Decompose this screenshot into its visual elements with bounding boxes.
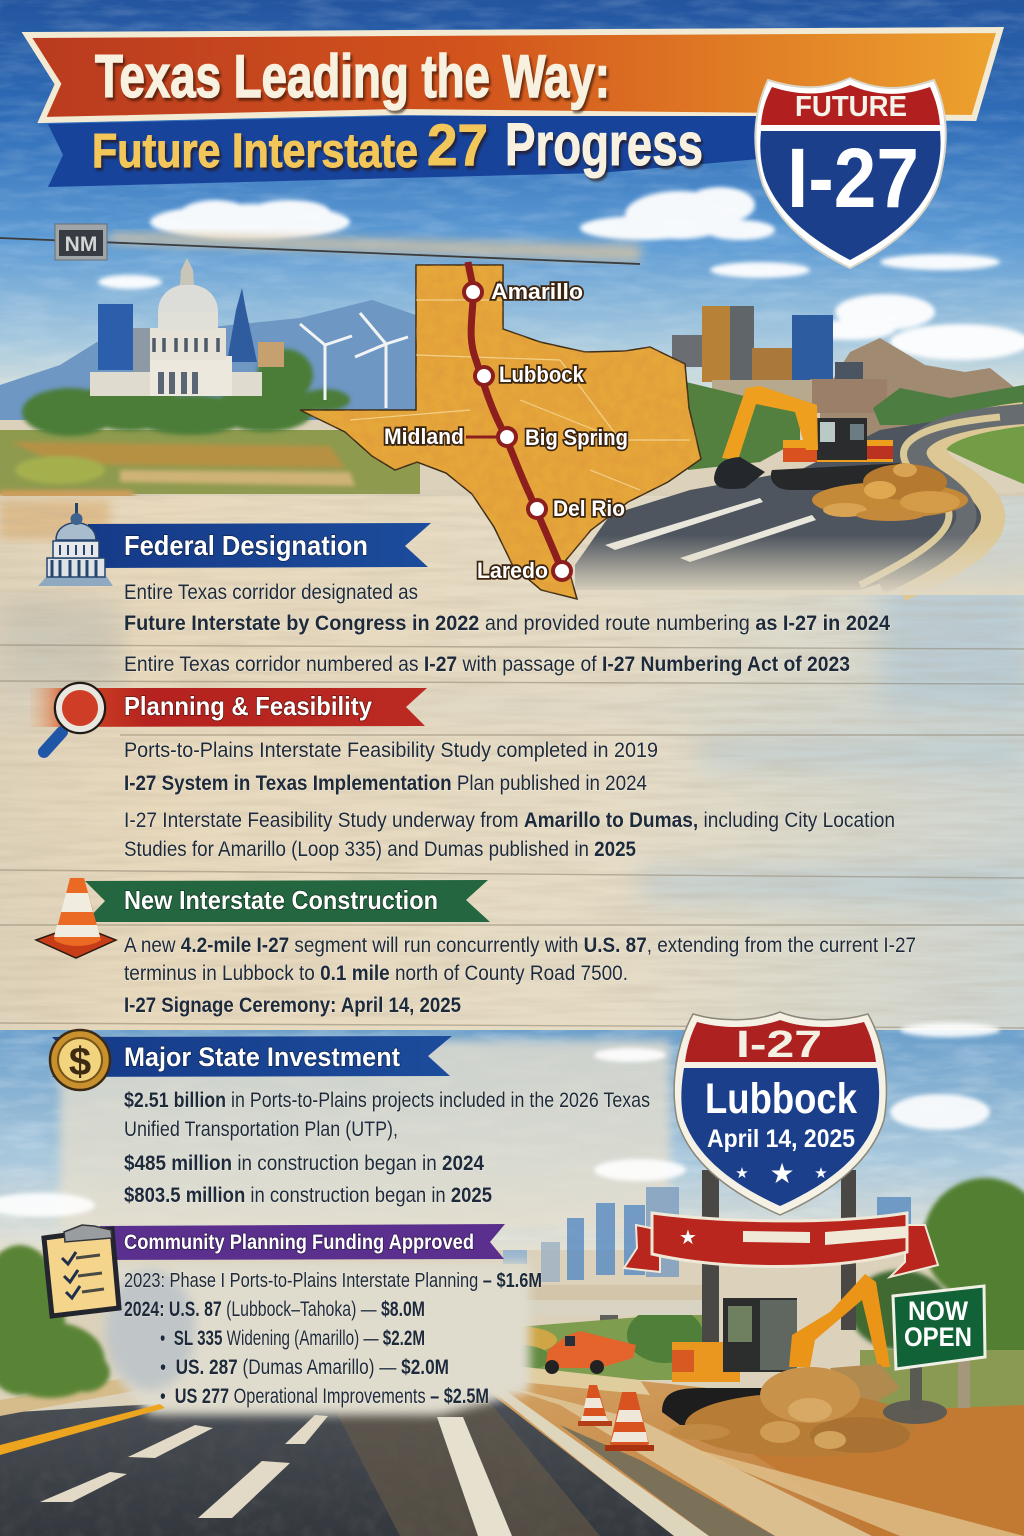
body text: • SL 335 Widening (Amarillo) — $2.2M [160, 1327, 425, 1350]
map labels [384, 279, 628, 583]
Lubbock shield sign: ★ [735, 1165, 749, 1182]
heading: Federal Designation [124, 530, 368, 561]
traffic cones [578, 1385, 654, 1451]
Lubbock shield sign: I-27 [736, 1024, 822, 1066]
body text [124, 1089, 650, 1207]
Lubbock shield sign: ★ [814, 1165, 828, 1182]
map labels: Amarillo [491, 279, 583, 304]
clouds top [98, 187, 1024, 360]
panel: major state investment [50, 1030, 650, 1207]
left shoulder [0, 1372, 165, 1416]
title line 1: Texas Leading the Way: [95, 43, 610, 110]
map labels: Laredo [477, 558, 548, 583]
plank band top [110, 232, 640, 262]
heading: Planning & Feasibility [124, 691, 372, 721]
orange ribbon [27, 30, 1000, 120]
blue wash on paper [0, 560, 1024, 900]
tan verge [480, 1362, 650, 1395]
yellow bush [15, 456, 105, 484]
field tan strips [0, 442, 355, 500]
road fade into paper [560, 535, 1024, 595]
Now Open sign: OPEN [904, 1322, 972, 1352]
body text [124, 739, 895, 861]
green trees left [22, 349, 350, 436]
body text: Unified Transportation Plan (UTP), [124, 1118, 398, 1141]
dirt pile top [812, 463, 968, 521]
gray wash on paper [0, 600, 120, 690]
body text: $803.5 million in construction began in 2025 [124, 1184, 492, 1207]
wind turbines [300, 313, 408, 408]
title banner [27, 30, 1000, 187]
heading: Major State Investment [124, 1042, 400, 1072]
city marker: Laredo [553, 562, 571, 580]
lower paper wash behind text [60, 1040, 670, 1230]
dirt pile bottom [670, 1367, 947, 1457]
lower sky [0, 1030, 1024, 1250]
mountains right [820, 338, 1024, 440]
title line 2: Future Interstate [92, 125, 418, 178]
Now Open sign [893, 1286, 985, 1410]
heading ribbon [100, 1224, 505, 1260]
orange truck [545, 1331, 636, 1374]
body text: Ports-to-Plains Interstate Feasibility Study completed in 2019 [124, 739, 658, 762]
body text: terminus in Lubbock to 0.1 mile north of County Road 7500. [124, 962, 628, 985]
heading ribbon [88, 523, 431, 568]
body text [124, 934, 916, 1017]
body text: I-27 System in Texas Implementation Plan published in 2024 [124, 772, 647, 795]
body text: $2.51 billion in Ports-to-Plains projects included in the 2026 Texas [124, 1089, 650, 1112]
top sky [0, 0, 1024, 400]
city marker: Lubbock [475, 367, 493, 385]
asphalt texture [3, 1474, 645, 1536]
Now Open sign: NOW [908, 1296, 968, 1326]
paper blue-gray wash [105, 1270, 195, 1390]
far skyline [503, 1187, 911, 1282]
sign posts [702, 1170, 856, 1370]
city marker: Del Rio [528, 500, 546, 518]
red white ribbon: ★ [679, 1227, 697, 1249]
excavator bottom [662, 1274, 900, 1425]
asphalt [0, 1385, 674, 1536]
plank texture overlay [0, 490, 1024, 1020]
I-27 route line [468, 262, 562, 571]
title line 2 [92, 111, 703, 178]
orange wash on paper [0, 500, 110, 540]
map labels: Midland [384, 424, 464, 449]
pale road stripes [490, 1382, 872, 1536]
pale road edge [480, 1381, 709, 1536]
Lubbock shield sign [674, 1012, 886, 1215]
Lubbock shield sign: April 14, 2025 [707, 1125, 855, 1153]
red white ribbon [624, 1213, 938, 1277]
body text: $485 million in construction began in 2024 [124, 1152, 484, 1175]
Future I-27 shield [755, 78, 946, 268]
map labels: Lubbock [499, 362, 585, 387]
map labels: Del Rio [553, 496, 625, 521]
lower paper left [100, 1262, 530, 1415]
Future I-27 shield: FUTURE [795, 91, 907, 123]
heading ribbon [30, 688, 427, 727]
icon: magnifying glass [44, 683, 105, 752]
body text: Entire Texas corridor numbered as I-27 with passage of I-27 Numbering Act of 2023 [124, 653, 850, 676]
icon: traffic cone [36, 878, 116, 958]
panel: new interstate construction [36, 878, 916, 1017]
body text: A new 4.2-mile I-27 segment will run concurrently with U.S. 87, extending from the current I-27 [124, 934, 916, 957]
body text: 2023: Phase I Ports-to-Plains Interstate Planning – $1.6M [124, 1270, 542, 1292]
road lines [0, 1404, 512, 1536]
heading ribbon [52, 1036, 452, 1077]
body text [124, 1270, 542, 1408]
title line 2: Progress [505, 111, 703, 178]
right road and grass [575, 410, 1024, 590]
overpass [473, 1285, 703, 1380]
Lubbock shield sign: Lubbock [705, 1075, 857, 1123]
Lubbock shield sign: ★ [769, 1158, 795, 1189]
mountains left [0, 300, 416, 420]
brown tint on asphalt [330, 1390, 600, 1536]
capitol building with towers [90, 258, 284, 396]
dirt patch right [700, 1405, 1024, 1536]
sky mottling [0, 0, 1024, 390]
body text: I-27 Interstate Feasibility Study underway from Amarillo to Dumas, including City Location [124, 809, 895, 832]
paper plank lines [0, 645, 1024, 1028]
body text [124, 581, 890, 676]
city marker: Amarillo [464, 283, 482, 301]
body text: Future Interstate by Congress in 2022 and provided route numbering as I-27 in 2024 [124, 612, 890, 635]
panel: federal designation [38, 503, 890, 676]
dirt shoulder [470, 1364, 1024, 1536]
NM state label [55, 224, 107, 260]
lower sky mottling [0, 1030, 1024, 1240]
map labels: Big Spring [525, 425, 628, 450]
body text: Entire Texas corridor designated as [124, 581, 418, 604]
NM border line [0, 238, 640, 264]
body text: Studies for Amarillo (Loop 335) and Dumas published in 2025 [124, 838, 636, 861]
heading: New Interstate Construction [124, 885, 438, 915]
body text: • US 277 Operational Improvements – $2.5M [160, 1385, 489, 1408]
city skyline right [672, 306, 1024, 470]
Midland connector [466, 436, 507, 438]
icon: capitol dome [38, 503, 113, 586]
city marker: Big Spring [498, 428, 516, 446]
panel: planning and feasibility [30, 683, 895, 861]
excavator top [714, 386, 905, 490]
left field [0, 430, 420, 494]
grass right of dirt [860, 1350, 1024, 1416]
trees left lower [0, 1245, 110, 1398]
blue ribbon [48, 116, 770, 187]
icon: dollar coin: $ [69, 1040, 91, 1084]
clouds lower [0, 1023, 1000, 1217]
Texas map [290, 260, 710, 605]
heading ribbon [85, 880, 490, 922]
NM state label: NM [65, 233, 97, 256]
icon: clipboard [44, 1225, 119, 1316]
paper section [0, 496, 1024, 1032]
title line 2: 27 [427, 113, 488, 178]
body text: 2024: U.S. 87 (Lubbock–Tahoka) — $8.0M [124, 1298, 425, 1321]
Future I-27 shield: I-27 [787, 131, 919, 225]
trees right lower [850, 1178, 1024, 1380]
panel: community planning funding [44, 1224, 542, 1408]
heading: Community Planning Funding Approved [124, 1231, 474, 1254]
body text: I-27 Signage Ceremony: April 14, 2025 [124, 994, 461, 1017]
icon: dollar coin [50, 1030, 110, 1090]
body text: • US. 287 (Dumas Amarillo) — $2.0M [160, 1356, 449, 1379]
